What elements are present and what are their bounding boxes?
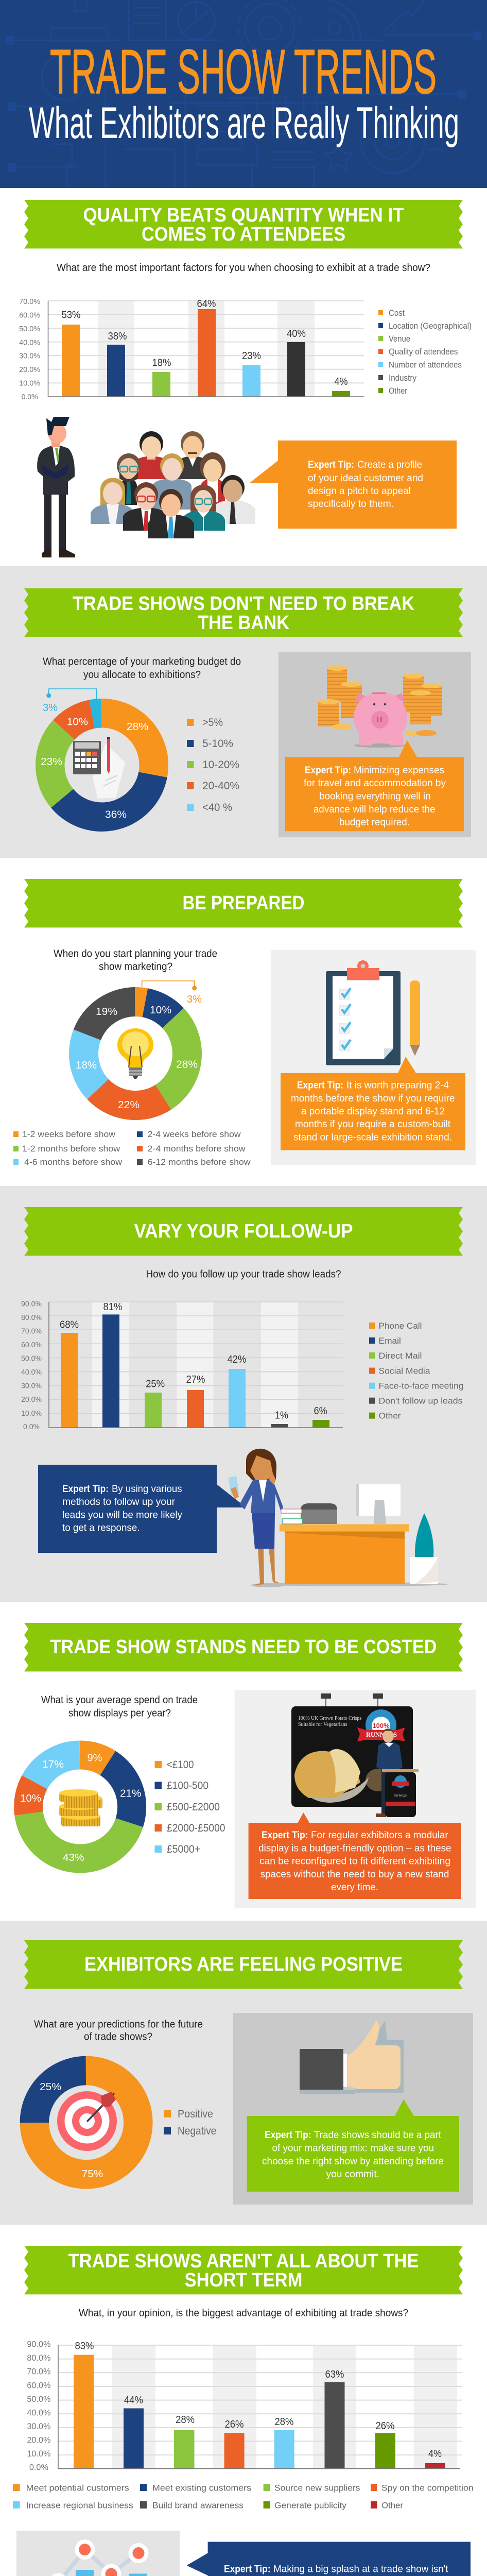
- icon: calculator and paper: [73, 737, 125, 799]
- bar chart: advantages: 26%: [376, 2420, 395, 2432]
- question: you allocate to exhibitions?: [83, 669, 201, 681]
- donut chart: predictions: [34, 2071, 138, 2180]
- bar chart: factors: 40%: [287, 328, 306, 340]
- banner heading: QUALITY BEATS QUANTITY WHEN IT: [83, 205, 404, 226]
- bar chart: factors: 0.0%: [22, 393, 38, 401]
- bar chart: advantages: 60.0%: [27, 2380, 50, 2390]
- donut chart: predictions: 75%: [82, 2168, 103, 2180]
- callout: expert tip orange: Minimizing expenses: [354, 765, 444, 776]
- bar chart: advantages: 90.0%: [27, 2340, 50, 2349]
- callout: expert tip orange: advance will help reduce the: [314, 804, 436, 815]
- legend: Meet existing customers: [152, 2483, 251, 2493]
- legend: £5000+: [167, 1843, 200, 1855]
- callout: expert tip orange: Expert Tip:: [305, 765, 351, 776]
- donut chart: planning time: [76, 981, 202, 1111]
- donut chart: predictions: 25%: [40, 2081, 61, 2093]
- bar chart: factors: 20.0%: [19, 365, 40, 374]
- legend: 1-2 months before show: [22, 1144, 120, 1154]
- legend: Negative: [178, 2125, 216, 2137]
- bar chart: follow-up methods: 27%: [186, 1374, 205, 1385]
- banner heading: TRADE SHOWS DON'T NEED TO BREAK: [73, 593, 414, 615]
- legend: Number of attendees: [389, 360, 462, 370]
- illustration: exhibition stand: Catch them Quick: [394, 1794, 407, 1798]
- bar chart: follow-up methods: 25%: [146, 1379, 165, 1390]
- banner heading: EXHIBITORS ARE FEELING POSITIVE: [84, 1954, 403, 1975]
- legend: Meet potential customers: [26, 2483, 129, 2493]
- bar chart: factors: 50.0%: [19, 325, 40, 333]
- callout: expert tip lime: choose the right show by attending before: [262, 2156, 444, 2167]
- question: How do you follow up your trade show leads?: [146, 1269, 341, 1280]
- callout: expert tip lime: Expert Tip:: [265, 2130, 311, 2141]
- bar chart: follow-up methods: 40.0%: [21, 1368, 42, 1377]
- legend: Industry: [389, 373, 416, 383]
- bar chart: advantages: 30.0%: [27, 2421, 50, 2431]
- legend: [13, 2483, 474, 2510]
- bar chart: factors: 70.0%: [19, 297, 40, 306]
- callout: expert tip lime: Trade shows should be a part: [314, 2130, 442, 2141]
- donut chart: planning time: 3%: [187, 994, 202, 1005]
- section: trade shows aren't all about the short term: [0, 2225, 487, 2576]
- bar chart: follow-up methods: 30.0%: [21, 1382, 42, 1391]
- callout: expert tip orange: stand or large-scale exhibition stand.: [293, 1132, 452, 1143]
- section: be prepared: [0, 858, 487, 1186]
- panel: thumbs up tip: [233, 2013, 473, 2205]
- bar chart: follow-up methods: 81%: [103, 1301, 123, 1313]
- legend: 6-12 months before show: [148, 1157, 251, 1167]
- banner heading: BE PREPARED: [182, 892, 305, 914]
- section: trade show stands need to be costed: [0, 1602, 487, 1921]
- legend: [13, 1129, 251, 1167]
- callout: expert tip red-orange: spaces without the need to buy a new stand: [260, 1869, 449, 1880]
- callout: expert tip navy: leads you will be more likely: [62, 1510, 182, 1520]
- bar chart: factors: [19, 297, 364, 401]
- question: of trade shows?: [84, 2031, 152, 2042]
- donut chart: spend: 21%: [120, 1788, 142, 1800]
- illustration: exhibition stand: 100%: [372, 1722, 390, 1730]
- panel: piggy bank tip: [279, 652, 471, 837]
- legend: Email: [379, 1336, 401, 1346]
- bar chart: follow-up methods: 0.0%: [23, 1422, 40, 1431]
- panel: growth chart icon: [16, 2531, 180, 2576]
- bar chart: advantages: 40.0%: [27, 2408, 50, 2417]
- banner heading: TRADE SHOWS AREN'T ALL ABOUT THE: [68, 2250, 419, 2272]
- header: [0, 0, 487, 188]
- legend: Cost: [389, 308, 405, 318]
- callout: expert tip orange: booking everything well in: [319, 791, 431, 802]
- illustration: crowd of attendees: [91, 431, 255, 538]
- legend: £2000-£5000: [167, 1822, 225, 1834]
- question: [54, 948, 217, 973]
- bar chart: follow-up methods: 68%: [60, 1319, 79, 1331]
- question: [34, 2019, 203, 2042]
- callout: expert tip red-orange: Expert Tip:: [262, 1830, 308, 1841]
- donut chart: planning time: 19%: [96, 1006, 117, 1018]
- legend: 2-4 months before show: [148, 1144, 246, 1154]
- donut chart: budget: 28%: [127, 721, 148, 733]
- section: vary your follow-up: [0, 1186, 487, 1602]
- bar chart: advantages: 4%: [428, 2448, 442, 2460]
- legend: Source new suppliers: [274, 2483, 360, 2493]
- legend: Other: [381, 2501, 403, 2510]
- bar chart: advantages: 83%: [75, 2341, 94, 2352]
- callout: expert tip orange: specifically to them.: [308, 499, 394, 510]
- illustration: businessman: [37, 417, 75, 557]
- callout: expert tip navy: Expert Tip:: [224, 2564, 271, 2575]
- legend: 20-40%: [202, 780, 239, 792]
- legend: 5-10%: [202, 738, 233, 750]
- illustration: exhibition stand: 100% UK Grown Potato Crisps: [298, 1716, 361, 1721]
- question: When do you start planning your trade: [54, 948, 217, 959]
- donut chart: planning time: 18%: [76, 1060, 97, 1071]
- callout: expert tip navy: [187, 2542, 471, 2576]
- callout: expert tip red-orange: every time.: [331, 1882, 378, 1893]
- callout: expert tip orange: [285, 740, 464, 831]
- banner heading: COMES TO ATTENDEES: [142, 224, 345, 245]
- legend: Quality of attendees: [389, 347, 458, 357]
- legend: >5%: [202, 717, 223, 728]
- legend: £100-500: [167, 1780, 208, 1792]
- icon: thumbs up: [300, 2021, 404, 2094]
- donut chart: spend: 17%: [42, 1759, 64, 1770]
- legend: [164, 2108, 216, 2137]
- bar chart: follow-up methods: 90.0%: [21, 1300, 42, 1309]
- legend: Venue: [389, 334, 410, 344]
- bar chart: advantages: 0.0%: [29, 2463, 48, 2472]
- banner heading: VARY YOUR FOLLOW-UP: [134, 1221, 353, 1242]
- banner heading: [24, 1623, 463, 1671]
- bar chart: advantages: 28%: [176, 2414, 195, 2426]
- bar chart: factors: 30.0%: [19, 352, 40, 361]
- bar chart: factors: 60.0%: [19, 311, 40, 319]
- bar chart: follow-up methods: 50.0%: [21, 1354, 42, 1363]
- bar chart: follow-up methods: 6%: [314, 1405, 327, 1417]
- legend: <£100: [167, 1759, 194, 1771]
- illustration: desk with monitor and plant: [263, 1484, 448, 1586]
- legend: Social Media: [379, 1366, 430, 1376]
- icon: target and arrow: [57, 2091, 117, 2151]
- legend: Direct Mail: [379, 1351, 422, 1361]
- callout: expert tip navy: Expert Tip:: [62, 1484, 109, 1495]
- bar chart: factors: 53%: [62, 309, 81, 320]
- callout: expert tip navy: Making a big splash at a trade show isn't: [273, 2564, 448, 2575]
- legend: [369, 1321, 463, 1421]
- icon: piggy bank and coins: [318, 666, 442, 748]
- panel: clipboard tip: [271, 950, 476, 1165]
- legend: Don't follow up leads: [379, 1396, 462, 1406]
- bar chart: advantages: 26%: [224, 2419, 244, 2430]
- legend: Increase regional business: [26, 2501, 133, 2510]
- bar chart: follow-up methods: 70.0%: [21, 1327, 42, 1336]
- callout: expert tip orange: budget required.: [339, 817, 410, 828]
- section: exhibitors are feeling positive: [0, 1921, 487, 2225]
- callout: expert tip orange: months before the show if you require: [291, 1093, 455, 1104]
- bar chart: factors: 40.0%: [19, 338, 40, 347]
- callout: expert tip navy: methods to follow up your: [62, 1497, 176, 1507]
- illustration: woman on phone: [229, 1449, 286, 1587]
- bar chart: factors: 23%: [242, 350, 261, 362]
- donut chart: budget: 10%: [67, 716, 88, 727]
- icon: gold coins: [59, 1789, 102, 1826]
- donut chart: budget: [41, 689, 154, 821]
- bar chart: follow-up methods: [21, 1300, 343, 1431]
- legend: 10-20%: [202, 759, 239, 771]
- bar chart: factors: 4%: [335, 376, 348, 387]
- bar chart: factors: 64%: [197, 298, 216, 310]
- bar chart: advantages: 70.0%: [27, 2367, 50, 2377]
- banner heading: SHORT TERM: [184, 2269, 303, 2291]
- callout: expert tip orange: [281, 1057, 465, 1150]
- question: What is your average spend on trade: [41, 1694, 198, 1706]
- callout: expert tip orange: [249, 440, 457, 529]
- banner heading: [24, 200, 463, 248]
- illustration: exhibition stand: [291, 1693, 419, 1817]
- callout: expert tip navy: to get a response.: [62, 1523, 140, 1534]
- bar chart: follow-up methods: 60.0%: [21, 1341, 42, 1349]
- bar chart: advantages: [27, 2340, 462, 2472]
- question: What are your predictions for the future: [34, 2019, 203, 2030]
- question: What are the most important factors for you when choosing to exhibit at a trade show?: [57, 262, 430, 274]
- callout: expert tip orange: Expert Tip:: [297, 1080, 343, 1091]
- callout: expert tip orange: for travel and accommodation by: [304, 778, 446, 789]
- bar chart: advantages: 10.0%: [27, 2449, 50, 2459]
- banner heading: TRADE SHOW STANDS NEED TO BE COSTED: [50, 1636, 437, 1658]
- bar chart: advantages: 28%: [275, 2416, 294, 2428]
- legend: Other: [379, 1411, 401, 1421]
- bar chart: follow-up methods: 10.0%: [21, 1409, 42, 1418]
- donut chart: planning time: 22%: [118, 1099, 140, 1111]
- question: What, in your opinion, is the biggest advantage of exhibiting at trade shows?: [79, 2308, 408, 2319]
- bar chart: follow-up methods: 80.0%: [21, 1313, 42, 1322]
- question: [41, 1694, 198, 1719]
- bar chart: advantages: 63%: [325, 2369, 344, 2380]
- bar chart: advantages: 44%: [124, 2395, 143, 2406]
- donut chart: budget: 23%: [41, 756, 62, 768]
- donut chart: budget: 36%: [105, 809, 127, 821]
- question: show marketing?: [99, 961, 172, 973]
- banner heading: [24, 879, 463, 927]
- legend: [154, 1759, 225, 1855]
- callout: expert tip lime: [247, 2099, 459, 2192]
- banner heading: [24, 588, 463, 637]
- donut chart: spend: [20, 1753, 142, 1863]
- question: show displays per year?: [68, 1708, 171, 1719]
- icon: light bulb: [117, 1028, 153, 1079]
- legend: Location (Geographical): [389, 321, 472, 331]
- legend: [187, 717, 239, 814]
- legend: <40 %: [202, 802, 232, 814]
- callout: expert tip navy: [38, 1465, 246, 1553]
- bar chart: factors: 38%: [108, 331, 127, 342]
- bar chart: factors: 18%: [152, 358, 171, 369]
- legend: [378, 308, 472, 396]
- bar chart: advantages: 50.0%: [27, 2394, 50, 2404]
- question: What percentage of your marketing budget do: [43, 656, 241, 668]
- illustration: exhibition stand: RUNNERS: [366, 1731, 397, 1738]
- bar chart: follow-up methods: 1%: [275, 1410, 288, 1421]
- donut chart: planning time: 10%: [150, 1005, 171, 1016]
- bar chart: follow-up methods: 42%: [228, 1354, 247, 1365]
- donut chart: spend: 43%: [63, 1852, 84, 1863]
- donut chart: budget: 3%: [43, 702, 58, 714]
- legend: Phone Call: [379, 1321, 422, 1331]
- callout: expert tip orange: It is worth preparing 2-4: [346, 1080, 449, 1091]
- section: trade shows don't need to break the bank: [0, 566, 487, 858]
- callout: expert tip orange: design a pitch to appeal: [308, 486, 411, 497]
- bar chart: advantages: 80.0%: [27, 2353, 50, 2363]
- callout: expert tip red-orange: [249, 1812, 461, 1899]
- callout: expert tip orange: Expert Tip:: [308, 460, 354, 470]
- legend: Spy on the competition: [381, 2483, 474, 2493]
- donut chart: spend: 9%: [88, 1753, 102, 1764]
- callout: expert tip orange: months if you require a custom-built: [295, 1119, 451, 1130]
- callout: expert tip orange: of your ideal customer and: [308, 473, 423, 484]
- icon: clipboard and pencil: [326, 960, 420, 1065]
- callout: expert tip orange: a portable display stand and 6-12: [301, 1106, 445, 1117]
- panel: display stand tip: [235, 1690, 476, 1908]
- callout: expert tip red-orange: can be reconfigured to fit different exhibiting: [259, 1856, 450, 1867]
- legend: 2-4 weeks before show: [148, 1129, 241, 1139]
- bar chart: factors: 10.0%: [19, 379, 40, 388]
- bar chart: follow-up methods: 20.0%: [21, 1395, 42, 1404]
- legend: Face-to-face meeting: [379, 1381, 463, 1391]
- callout: expert tip navy: By using various: [112, 1484, 182, 1495]
- question: [43, 656, 241, 681]
- section: quality beats quantity: [0, 188, 487, 566]
- banner heading: [24, 2246, 463, 2294]
- legend: Positive: [178, 2108, 213, 2120]
- donut chart: planning time: 28%: [176, 1059, 198, 1071]
- legend: Build brand awareness: [152, 2501, 243, 2510]
- legend: 4-6 months before show: [24, 1157, 123, 1167]
- legend: £500-£2000: [167, 1801, 220, 1813]
- legend: Other: [389, 386, 407, 396]
- callout: expert tip orange: Create a profile: [357, 460, 422, 470]
- callout: expert tip lime: of your marketing mix: make sure you: [272, 2143, 434, 2154]
- callout: expert tip red-orange: display is a budget-friendly option – as these: [258, 1843, 451, 1854]
- banner heading: THE BANK: [198, 612, 290, 634]
- bar chart: advantages: 20.0%: [27, 2435, 50, 2445]
- banner heading: [24, 1940, 463, 1989]
- callout: expert tip red-orange: For regular exhibitors a modular: [311, 1830, 448, 1841]
- banner heading: [24, 1207, 463, 1256]
- illustration: exhibition stand: Suitable for Vegetarians: [298, 1722, 347, 1727]
- legend: 1-2 weeks before show: [22, 1129, 116, 1139]
- legend: Generate publicity: [274, 2501, 347, 2510]
- callout: expert tip lime: you commit.: [326, 2169, 379, 2180]
- donut chart: spend: 10%: [20, 1793, 41, 1804]
